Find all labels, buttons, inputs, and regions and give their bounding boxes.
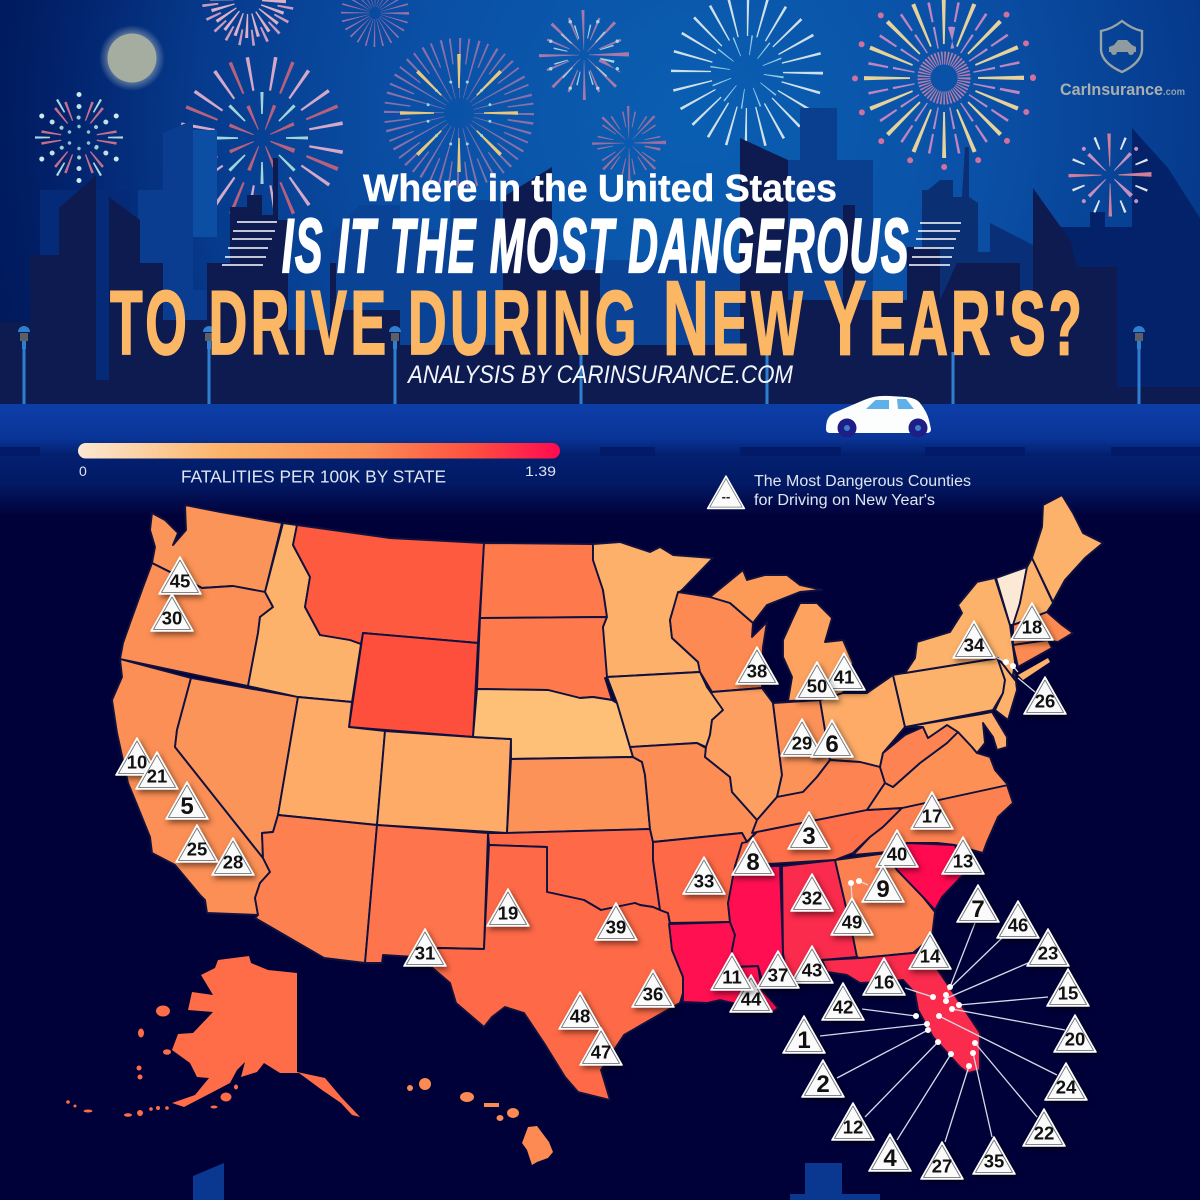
state: Mississippi [728,866,787,983]
road [0,404,1200,516]
state: New Jersey [995,660,1017,720]
skyline: slanted building [990,223,1033,404]
state: West Virginia [880,725,958,787]
firework 4 [205,0,291,43]
marker 14 [909,932,951,969]
state: Tennessee [735,808,902,866]
marker 50 [796,662,838,699]
marker 11: 11 [722,966,742,988]
marker 10: 10 [127,752,147,772]
marker 36 [632,970,674,1007]
marker 28 [212,838,254,875]
marker 43 [791,946,833,983]
marker 9 [862,865,904,903]
marker 6 [811,720,853,758]
state: New Mexico [365,825,488,963]
marker 35 [973,1137,1015,1174]
marker 31: 31 [415,942,435,964]
legend: county marker: -- [722,489,730,504]
marker 23: 23 [1038,942,1058,964]
state: New York [905,578,1015,680]
marker 18: 18 [1022,616,1042,638]
state: Indiana [773,700,830,797]
skyline: far left layer [40,190,130,404]
firework 5 [355,0,395,33]
firework 9 [601,115,657,171]
marker 20 [1054,1015,1096,1052]
marker 35: 35 [984,1150,1004,1172]
marker 14: 14 [920,946,941,966]
state: Wisconsin [670,592,767,692]
title line 1: Where in the United States [363,168,837,210]
state: Vermont [996,567,1027,625]
marker 19 [487,889,529,926]
marker 6: 6 [825,731,839,758]
marker 7 [957,885,999,923]
state: Minnesota [593,542,713,677]
marker 39 [595,903,637,940]
marker 17 [911,792,953,829]
marker 3 [788,812,830,850]
skyline: front layer [0,138,1200,404]
state: Iowa [607,672,723,747]
marker 47: 47 [591,1042,611,1062]
marker 29 [781,719,823,756]
marker 47 [580,1028,622,1065]
logo: CarInsurance.com [1060,21,1185,99]
marker 12 [832,1103,874,1140]
state: Louisiana [669,922,778,1012]
marker 32: 32 [802,888,822,908]
legend: county marker: for Driving on New Year's [754,492,935,509]
marker 39: 39 [606,916,626,938]
state: Massachusetts [1013,612,1073,645]
title line 3: TO DRIVE DURING [110,273,640,374]
state: Nevada [175,678,298,858]
marker 50: 50 [807,676,827,696]
legend: county marker: The Most Dangerous Counties [754,473,971,490]
skyline: light left building [193,130,217,237]
skyline: spire building [880,147,1000,404]
marker 48 [559,992,601,1029]
state: Illinois [705,687,782,820]
leader lines [820,657,1065,1142]
marker 37: 37 [768,964,788,986]
state: Ohio [820,675,905,767]
marker 16 [863,958,905,995]
logo: CarInsurance.com: CarInsurance [1060,81,1163,99]
marker 15: 15 [1058,982,1078,1004]
state: Georgia [835,853,935,958]
state: Oklahoma [488,829,660,910]
firework 7 [691,16,803,128]
marker 49 [831,898,873,935]
marker 40 [876,830,918,867]
firework 1 [20,79,138,196]
marker 5: 5 [180,793,194,820]
firework 8 [855,0,1033,167]
marker 26: 26 [1035,690,1055,712]
state: Connecticut and Rhode Island [1013,640,1052,667]
state: Utah [278,697,385,825]
state: Arizona [255,815,377,963]
marker 46 [997,901,1039,938]
marker 23 [1027,929,1069,966]
marker 28: 28 [223,852,243,872]
legend: county marker [708,473,971,509]
marker 18 [1011,603,1053,640]
state: North Carolina [853,785,1013,855]
marker 8 [732,838,774,876]
state: Virginia [867,732,1008,810]
marker 45 [159,557,201,594]
speed lines [222,222,961,265]
legend: colour scale: 0 [79,463,87,479]
marker 33: 33 [694,870,714,892]
marker 7: 7 [971,896,985,923]
moon [99,25,165,91]
state: Kansas [507,757,650,833]
state: Maryland and Delaware [905,712,1007,753]
marker 4 [869,1134,911,1172]
marker 19: 19 [498,902,518,924]
car [826,396,931,438]
marker 41: 41 [834,666,854,688]
state: Nebraska [473,689,633,759]
state: Alabama [782,860,857,980]
state: Maine [1032,495,1103,602]
marker 13: 13 [953,850,973,872]
marker 43: 43 [802,960,822,980]
marker 17: 17 [922,806,942,826]
marker 2 [802,1060,844,1098]
state: Oregon [120,563,273,686]
legend: colour scale: 1.39 [525,463,556,479]
marker 27: 27 [932,1156,952,1176]
marker 12: 12 [843,1116,863,1138]
state: Hawaii [407,1078,553,1165]
marker 34 [953,621,995,658]
state: Wyoming [349,633,478,737]
legend: colour scale: FATALITIES PER 100K BY STATE [181,466,446,486]
state: Missouri [630,743,757,842]
state: Long Island [1018,658,1050,680]
state: Pennsylvania [893,658,1005,727]
marker 42: 42 [833,996,853,1018]
state: North Dakota [480,543,607,618]
firework 10 [1058,123,1162,227]
marker 16: 16 [874,972,894,992]
marker 1 [783,1016,825,1054]
marker 38: 38 [747,660,767,682]
marker 36: 36 [643,984,663,1004]
map of the United States [66,495,1103,1165]
marker 10 [116,738,158,775]
state: Kentucky [752,760,885,833]
state: Michigan upper [710,570,822,623]
marker 21: 21 [147,766,167,786]
legend: colour scale [78,443,560,486]
marker 34: 34 [964,634,985,656]
firework 2 [178,54,346,222]
marker 5 [166,782,208,820]
county markers [116,557,1096,1179]
marker 8: 8 [746,849,760,876]
state: New Hampshire [1013,558,1053,625]
marker 22: 22 [1034,1122,1054,1144]
logo: CarInsurance.com: .com [1163,86,1185,98]
subtitle: ANALYSIS BY CARINSURANCE.COM [406,361,793,389]
marker 21 [136,752,178,789]
marker 30 [151,594,193,631]
marker 24: 24 [1056,1076,1077,1098]
skyline: tall centre-right building [787,108,873,404]
state: Montana [293,525,484,644]
marker 1: 1 [797,1027,811,1054]
marker 4: 4 [883,1145,897,1172]
firework 6 [537,8,631,102]
firework 3 [389,43,529,183]
marker 22 [1023,1109,1065,1146]
skyline: left mid layer [138,120,225,404]
road dashes [0,447,1200,456]
state: South Carolina [887,843,963,910]
marker 13 [942,837,984,874]
marker 33 [683,857,725,894]
marker 40: 40 [887,844,907,864]
marker 41 [823,653,865,690]
marker 37 [757,951,799,988]
street lamps [18,326,1145,404]
marker 27 [921,1142,963,1179]
marker 25 [176,825,218,862]
marker 48: 48 [570,1006,590,1026]
state: Texas [429,845,683,1100]
state: Arkansas [653,833,747,923]
marker 24 [1045,1063,1087,1100]
marker 26 [1024,677,1066,714]
marker 31 [404,929,446,966]
marker 11 [711,953,753,990]
state: Idaho [248,523,361,702]
marker 25: 25 [187,838,207,860]
marker 9: 9 [876,876,890,903]
skyline: right layer [1040,128,1200,404]
marker 15 [1047,969,1089,1006]
marker 44 [730,975,772,1012]
state: Washington [150,505,282,592]
marker 30: 30 [162,608,182,628]
marker 44: 44 [741,988,762,1010]
state: Michigan lower [783,603,853,701]
marker 29: 29 [792,732,812,754]
sky background [0,0,1200,405]
marker 49: 49 [842,912,862,932]
marker 3: 3 [802,823,816,850]
marker 2: 2 [816,1071,830,1098]
marker 42 [822,983,864,1020]
marker 45: 45 [170,570,190,592]
state: South Dakota [477,617,612,700]
marker 38 [736,647,778,684]
bottom skyline hints [193,1163,880,1200]
state: California [112,659,270,915]
state: Colorado [377,731,511,833]
marker 46: 46 [1008,914,1028,936]
skyline: centre layer [330,200,800,404]
state: Alaska [66,956,360,1117]
marker 32 [791,874,833,911]
marker 20: 20 [1065,1028,1085,1050]
state: Florida [822,952,980,1073]
